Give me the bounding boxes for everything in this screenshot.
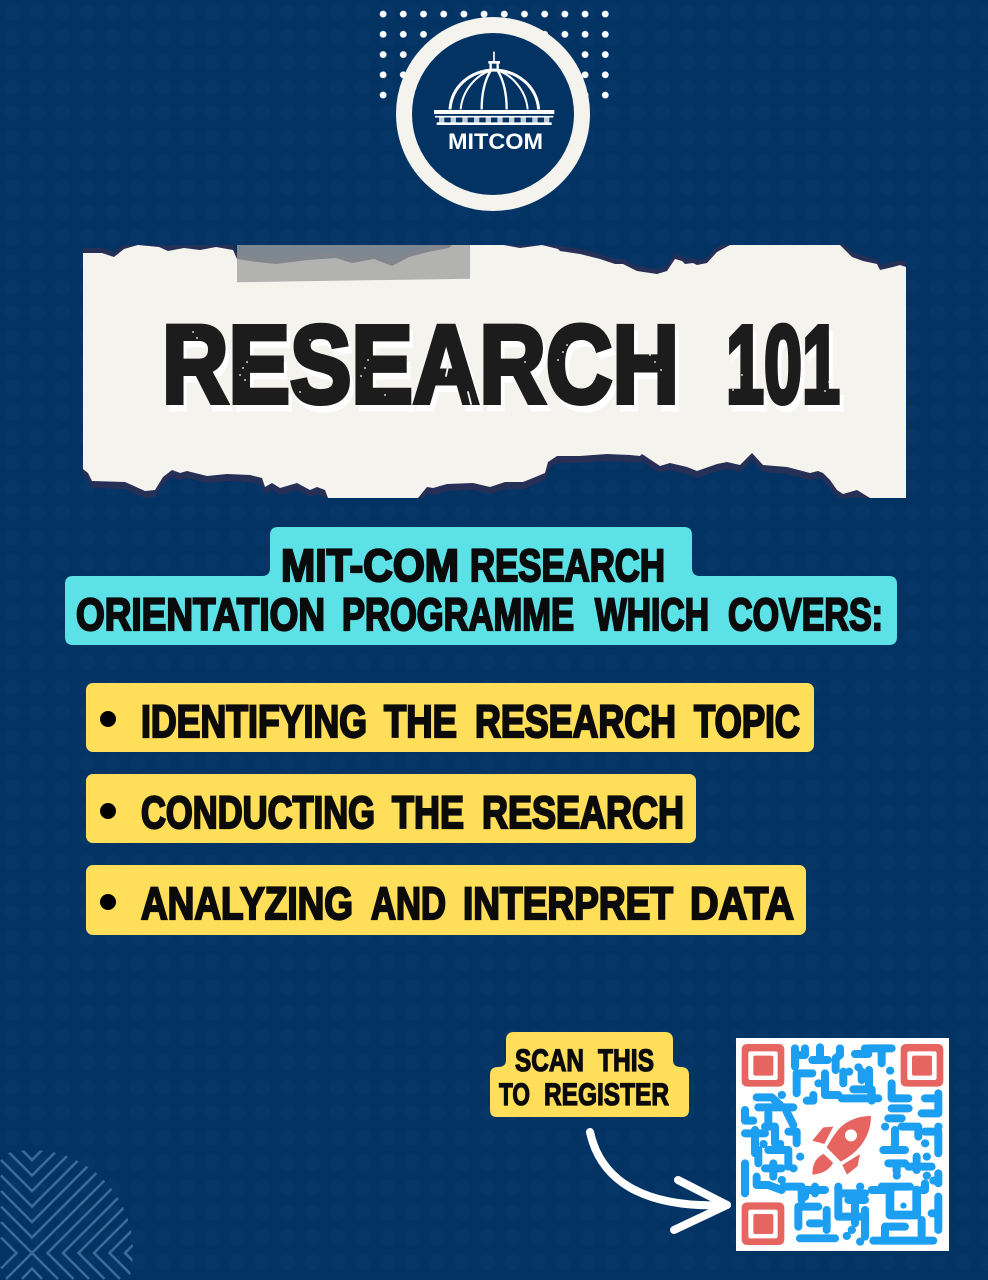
logo: MITCOM ring badge: [404, 25, 582, 203]
decorative chevron circle: [0, 1150, 133, 1280]
bullet: identifying the research topic: TOPIC: [694, 696, 800, 747]
bullet: conducting the research: THE: [392, 787, 464, 838]
subtitle panel: MIT-COM: [281, 540, 459, 591]
bullet: analyzing and interpret data: DATA: [690, 878, 794, 929]
bullet: identifying the research topic: THE: [384, 696, 457, 747]
logo wordmark: MITCOM: [448, 129, 543, 154]
callout: scan this to register: THIS: [598, 1042, 654, 1078]
title: 101: [729, 310, 844, 433]
title: RESEARCH: [162, 304, 679, 426]
subtitle panel: PROGRAMME: [342, 589, 574, 640]
arrow to QR code: [590, 1132, 727, 1230]
bullet: conducting the research: [86, 774, 696, 843]
QR modules: [745, 1047, 939, 1242]
subtitle panel: [65, 527, 897, 645]
icon: rocket: [812, 1116, 871, 1175]
bullet: conducting the research: CONDUCTING: [141, 787, 375, 838]
dot grid behind logo: [373, 4, 615, 105]
QR code: [736, 1038, 949, 1251]
callout: scan this to register: TO: [499, 1076, 530, 1112]
bullet: identifying the research topic: RESEARCH: [475, 696, 676, 747]
bullet: identifying the research topic: IDENTIFYING: [141, 696, 367, 747]
callout: scan this to register: REGISTER: [544, 1076, 669, 1112]
bullet: analyzing and interpret data: AND: [371, 878, 446, 929]
icon: dome building: [434, 52, 554, 124]
subtitle panel: COVERS:: [728, 589, 883, 640]
bullet: identifying the research topic: [86, 683, 814, 752]
callout: scan this to register: [490, 1032, 689, 1117]
title: RESEARCH: [165, 310, 683, 433]
bullet: analyzing and interpret data: ANALYZING: [141, 878, 353, 929]
QR finder squares: [742, 1044, 943, 1245]
bullet: analyzing and interpret data: [86, 865, 806, 935]
panel: torn paper title banner: [83, 240, 906, 505]
bullet: analyzing and interpret data: INTERPRET: [463, 878, 673, 929]
callout: scan this to register: SCAN: [515, 1042, 584, 1078]
title: 101: [726, 304, 840, 426]
subtitle panel: RESEARCH: [470, 540, 665, 591]
bullet: conducting the research: RESEARCH: [482, 787, 684, 838]
subtitle panel: ORIENTATION: [76, 589, 325, 640]
subtitle panel: WHICH: [595, 589, 709, 640]
